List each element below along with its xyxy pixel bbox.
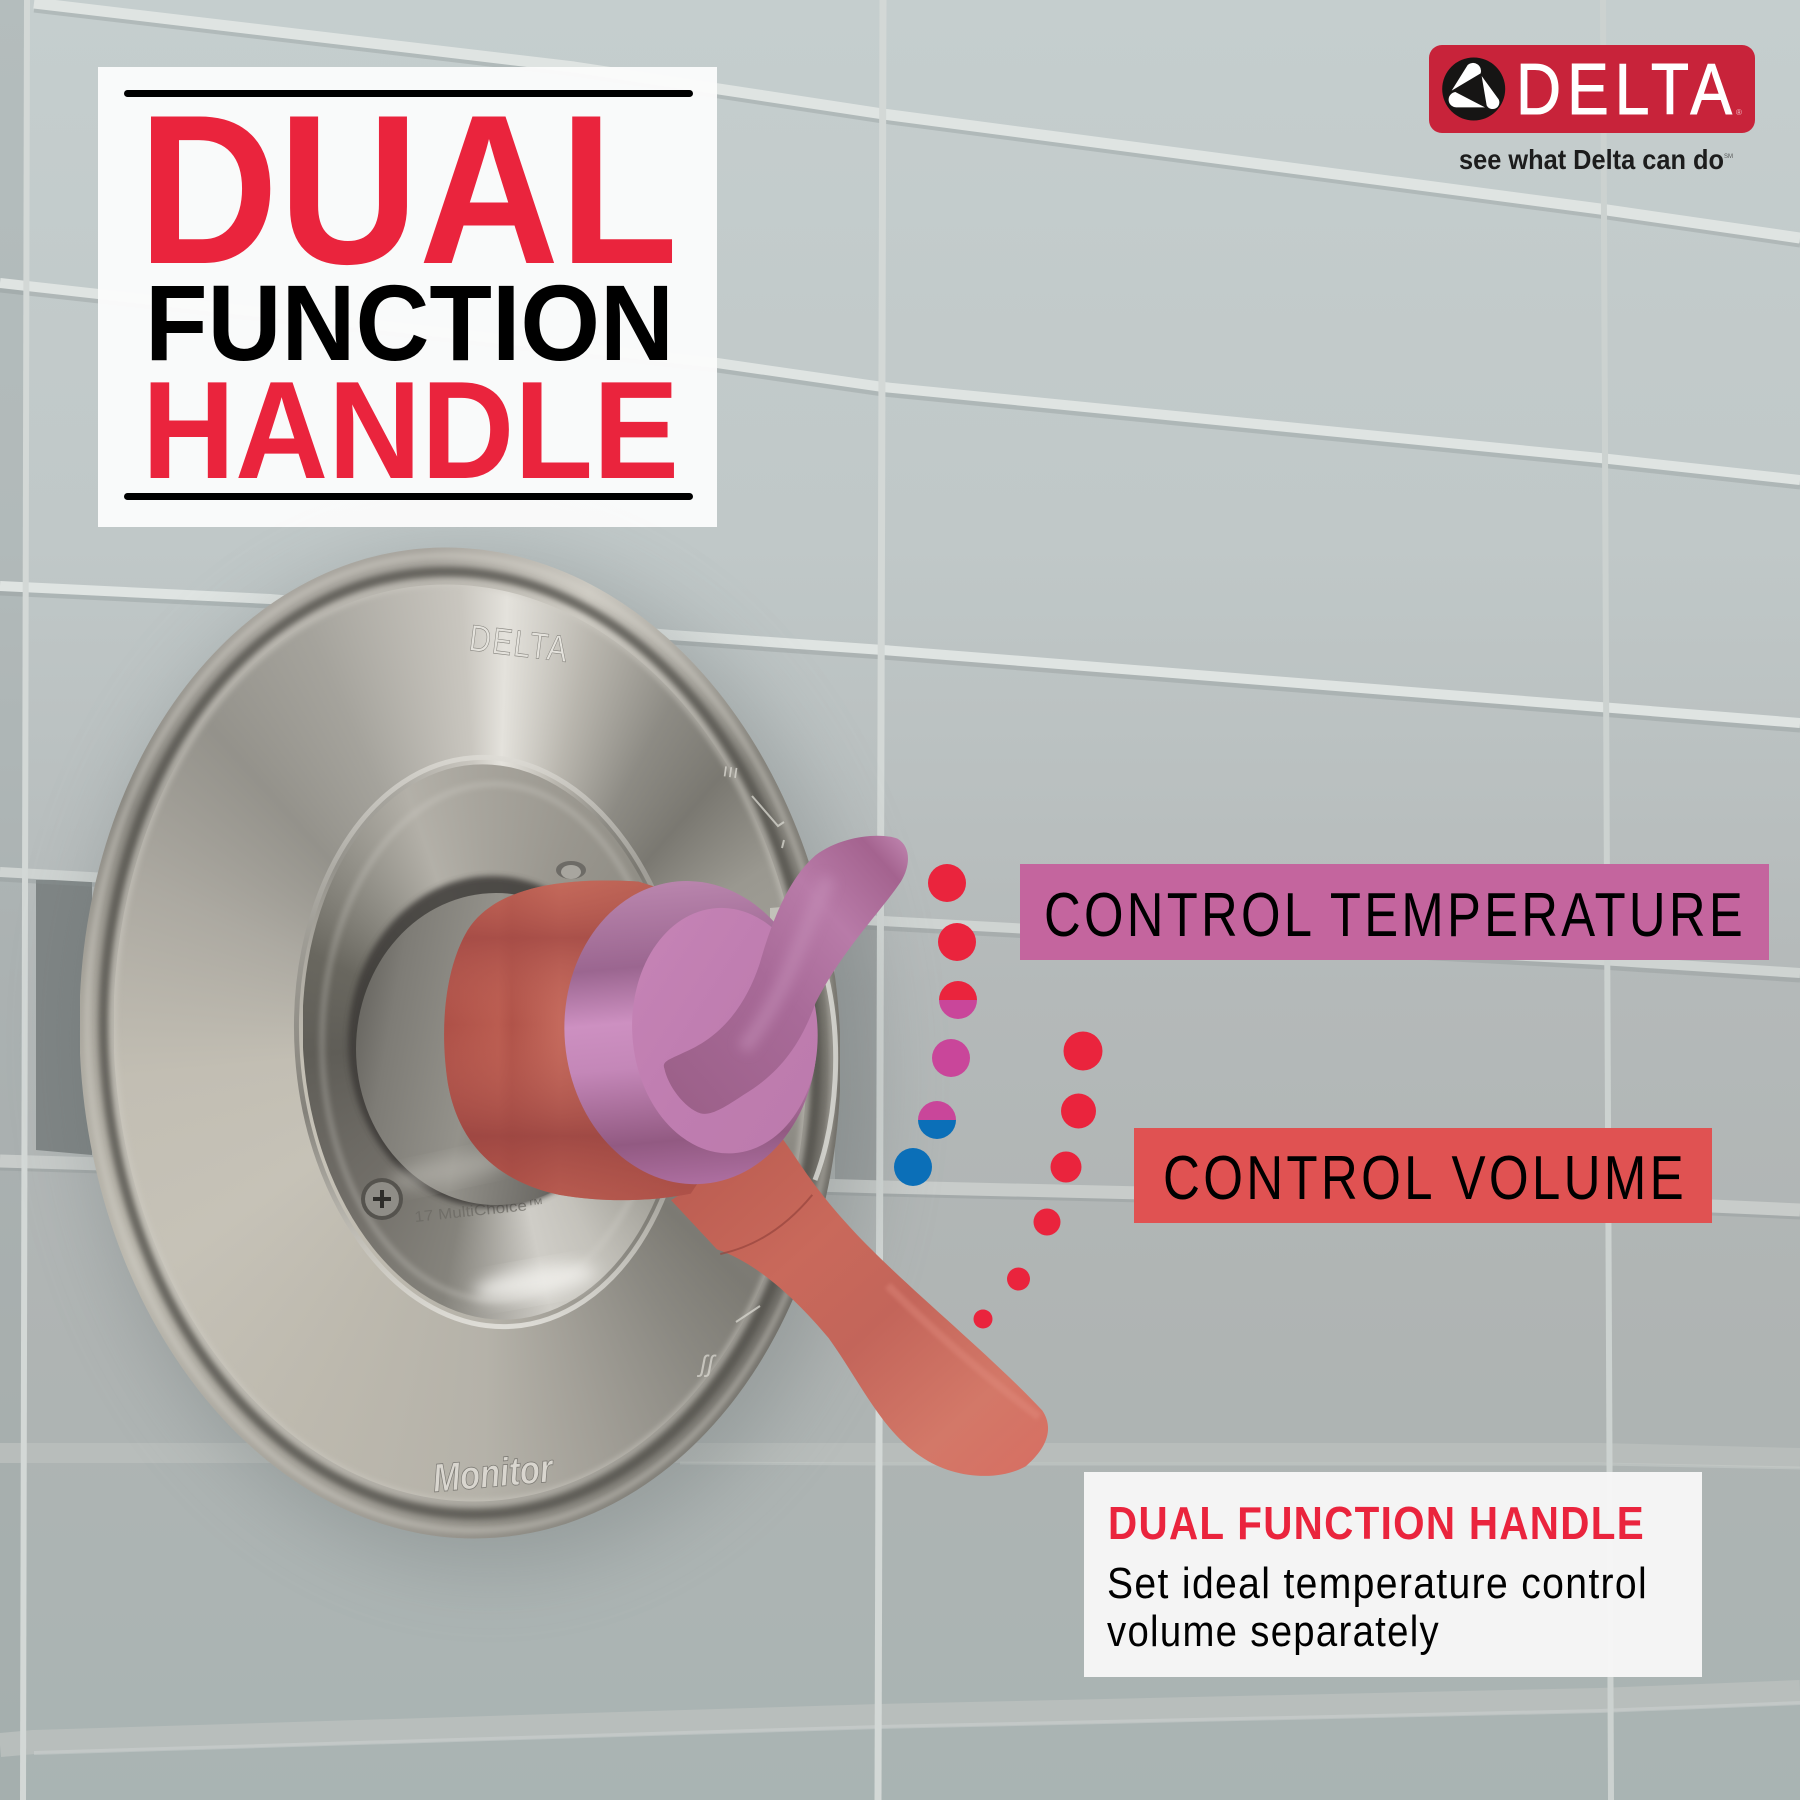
temperature ring (pink): [552, 870, 830, 1195]
Delta logo: [1429, 45, 1755, 175]
title: FUNCTION: FUNCTION: [145, 262, 674, 383]
dial symbols: ııı: [721, 760, 740, 783]
shower valve: metal trim plate and escutcheon: [52, 529, 904, 1591]
dotted arc: temperature: [894, 864, 977, 1186]
temperature disc (pink): [624, 902, 826, 1160]
title: HANDLE: HANDLE: [142, 353, 679, 508]
callout heading: DUAL FUNCTION HANDLE: [1108, 1497, 1645, 1549]
callout body: Set ideal temperature control: [1107, 1559, 1648, 1608]
screw: upper: [556, 861, 586, 879]
right dial marks: [736, 796, 784, 1322]
volume collar (coral): [444, 881, 783, 1200]
callout: dual function handle description: [1084, 1472, 1702, 1677]
recess bowl: [303, 764, 683, 1320]
recess bright reflection: [471, 1256, 599, 1308]
label: control temperature: [1020, 864, 1769, 960]
plate face: [114, 584, 806, 1502]
registered mark: ®: [1736, 108, 1742, 117]
plate outer rim: [80, 547, 840, 1539]
valve cylinder: [348, 876, 636, 1208]
embossed model script: Monitor: [431, 1447, 556, 1501]
dual function handle illustration: [444, 836, 1048, 1476]
icon: Delta mark: [1442, 58, 1505, 120]
title panel: [98, 67, 717, 527]
recess lettering: 17 MultiChoice™: [414, 1195, 545, 1226]
label: control volume: CONTROL VOLUME: [1163, 1144, 1687, 1213]
dotted arc: volume: [974, 1032, 1102, 1328]
screw: lower: [361, 1178, 403, 1220]
wordmark: DELTA: [1516, 49, 1738, 130]
recess outer ring: [278, 744, 708, 1340]
spray symbol: ʃʃ: [696, 1351, 717, 1378]
temperature lever (pink): [664, 836, 908, 1114]
callout body: [1107, 1559, 1648, 1656]
callout body: volume separately: [1107, 1607, 1440, 1656]
service mark: SM: [1724, 154, 1733, 160]
volume lever (coral): [671, 1134, 1048, 1476]
embossed brand text: DELTA: [467, 617, 571, 670]
plate shadow on wall: [52, 529, 904, 1591]
title: DUAL: DUAL: [138, 71, 678, 309]
right rim arc: [815, 975, 836, 1180]
handle backing strip: [770, 902, 840, 922]
label: control volume: [1134, 1128, 1712, 1223]
tagline: see what Delta can do: [1459, 144, 1724, 175]
